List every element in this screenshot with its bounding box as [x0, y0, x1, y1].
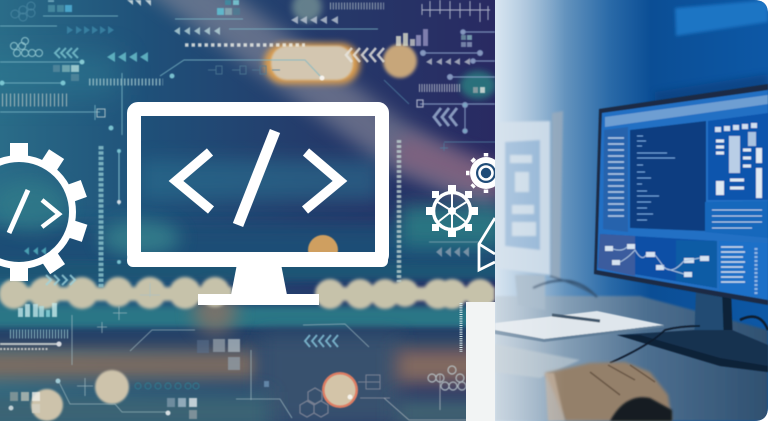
arrow rows [24, 0, 470, 347]
back monitor [495, 111, 597, 310]
light fade overlay [495, 0, 554, 421]
dotted bars and tick bars [0, 0, 490, 349]
keyboard [511, 349, 579, 378]
hand on mouse [545, 362, 672, 421]
lower right text panel [705, 201, 768, 238]
panel: right photo of developer at workstation [495, 0, 768, 421]
gear with code symbol [0, 143, 87, 281]
cube icon [479, 218, 495, 270]
large gear icon [426, 185, 478, 237]
white panel strip [461, 302, 495, 421]
diagram panel [708, 113, 768, 200]
small square clusters [10, 0, 485, 419]
monitor with code symbol [127, 109, 388, 305]
main monitor stand [610, 290, 768, 372]
HUD details [0, 0, 496, 420]
main monitor [594, 84, 768, 305]
right side HUD lines [8, 30, 496, 420]
paper and pen [495, 311, 664, 342]
panel: left illustration [0, 0, 530, 421]
bokeh light band [0, 277, 495, 309]
tree list panel [603, 127, 628, 232]
teal and navy HUD lines, upper left [0, 2, 378, 205]
toolbar [605, 95, 768, 127]
code editor panel [630, 121, 706, 231]
node graph panel [634, 236, 716, 288]
desk surface [495, 296, 768, 421]
small gear icon [466, 153, 495, 193]
amber bokeh lights [31, 0, 417, 421]
HUD dots [0, 60, 324, 264]
office wall [495, 0, 768, 421]
property list panel [719, 241, 768, 299]
blurred city light background [0, 0, 530, 421]
code brackets [176, 131, 340, 225]
